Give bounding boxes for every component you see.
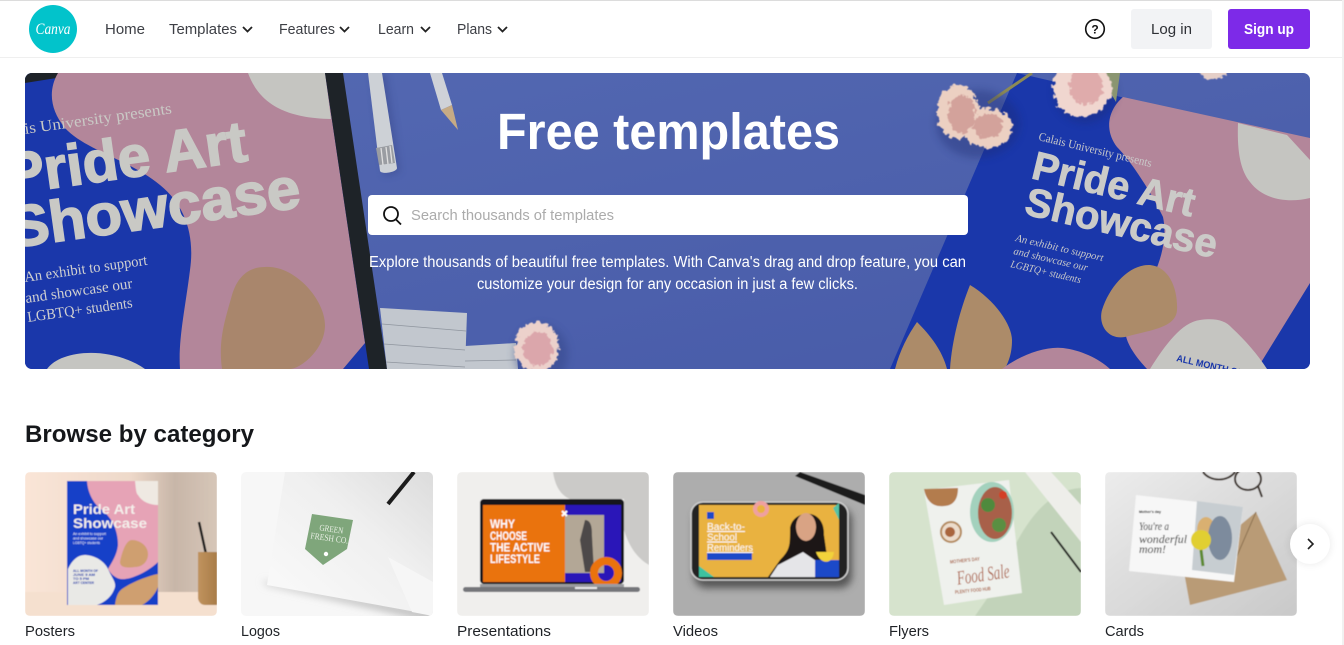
card: Posters: LGBTQ+ students xyxy=(73,541,100,545)
left tablet poster: and showcase our xyxy=(24,276,134,307)
button: sign up: Sign up xyxy=(1244,22,1294,38)
card: Videos: Back-to- xyxy=(707,522,745,533)
card: Logos: GREEN xyxy=(319,522,344,536)
card: Cards: Mother's day xyxy=(1139,509,1162,514)
right poster: ALL MONTH OF xyxy=(1175,353,1244,379)
card: Presentations: CHOOSE xyxy=(490,529,527,543)
label: Posters: Posters xyxy=(25,624,75,640)
hero description xyxy=(369,254,966,293)
notepaper xyxy=(380,308,518,369)
nav link: Templates: Templates xyxy=(169,22,237,38)
button: sign up xyxy=(1228,9,1310,49)
icon: help: ? xyxy=(1091,22,1099,36)
nav link: Plans: Plans xyxy=(457,22,492,38)
card: Posters: Showcase xyxy=(73,515,147,531)
left tablet poster: LGBTQ+ students xyxy=(26,295,134,326)
card: Videos xyxy=(673,472,865,640)
section heading: Browse by category: Browse by category xyxy=(25,421,255,448)
nav link: Features: Features xyxy=(279,22,335,38)
card: Logos: FRESH CO. xyxy=(310,530,349,546)
card: Cards: mom! xyxy=(1139,542,1166,556)
right poster: and showcase our xyxy=(1012,246,1090,274)
card: Presentations: WHY xyxy=(490,517,515,531)
logo: Canva xyxy=(29,5,77,53)
card: Videos: Reminders xyxy=(707,543,753,554)
white pen xyxy=(368,73,400,176)
label: Cards: Cards xyxy=(1105,624,1144,640)
card: Flyers: Food Sale xyxy=(955,560,1011,590)
left tablet poster: An exhibit to support xyxy=(23,253,149,286)
nav link: Learn: Learn xyxy=(378,22,414,38)
left tablet poster: Pride Art xyxy=(1,109,251,207)
right poster: Calais University presents xyxy=(1037,129,1154,170)
card: Posters: Pride Art xyxy=(73,501,135,517)
right poster: Showcase xyxy=(1021,180,1222,267)
card: Posters: ART CENTER xyxy=(73,580,94,585)
icon: help xyxy=(1086,20,1104,38)
logo: Canva: Canva xyxy=(36,21,70,38)
hero description: Explore thousands of beautiful free templates. With Canva's drag and drop feature, you can xyxy=(369,254,966,271)
label: Flyers: Flyers xyxy=(889,624,929,640)
nav link: Home: Home xyxy=(105,22,145,38)
search placeholder: Search thousands of templates xyxy=(411,208,614,224)
flower: top right xyxy=(1199,73,1228,81)
card: Posters: and showcase our xyxy=(73,536,104,540)
heading: Free templates: Free templates xyxy=(497,103,840,160)
card: Posters: ALL MONTH OF xyxy=(73,568,98,573)
card: Flyers: MOTHER'S DAY xyxy=(950,556,981,566)
hero banner xyxy=(25,73,1310,369)
card: Presentations xyxy=(457,472,649,640)
button: log in xyxy=(1131,9,1212,49)
hero description: customize your design for any occasion in just a few clicks. xyxy=(477,276,858,293)
card: Posters xyxy=(25,472,217,640)
card: Presentations: LIFESTYLE xyxy=(490,552,540,566)
flower: bottom xyxy=(510,320,568,369)
left tablet poster: Showcase xyxy=(5,156,304,261)
card: Cards: wonderful xyxy=(1139,532,1188,546)
label: Videos: Videos xyxy=(673,624,718,640)
flower: top xyxy=(1050,73,1120,124)
card: Posters: An exhibit to support xyxy=(73,532,106,536)
pencil xyxy=(430,73,458,130)
icon: search xyxy=(384,207,401,224)
label: Logos: Logos xyxy=(241,624,280,640)
carousel next button xyxy=(1289,523,1331,565)
card: Videos: School xyxy=(707,532,737,544)
right poster: Pride Art xyxy=(1028,144,1200,226)
card: Posters: JUNE 9 AM xyxy=(73,572,96,577)
label: Presentations: Presentations xyxy=(457,624,551,640)
card: Flyers: PLENTY FOOD HUB xyxy=(955,586,991,596)
flower: large xyxy=(936,73,1032,158)
right poster: LGBTQ+ students xyxy=(1008,259,1082,286)
card: Cards xyxy=(1105,468,1297,640)
button: log in: Log in xyxy=(1151,22,1192,38)
card: Cards: You're a xyxy=(1139,519,1169,533)
search box xyxy=(368,195,968,235)
card: Flyers xyxy=(889,472,1081,640)
left tablet poster xyxy=(0,73,387,369)
right poster xyxy=(890,73,1320,379)
card: Logos xyxy=(241,472,433,640)
card: Presentations: THE ACTIVE xyxy=(490,540,550,554)
card: Posters: TO 5 PM xyxy=(73,576,90,581)
right poster: An exhibit to support xyxy=(1013,233,1106,264)
